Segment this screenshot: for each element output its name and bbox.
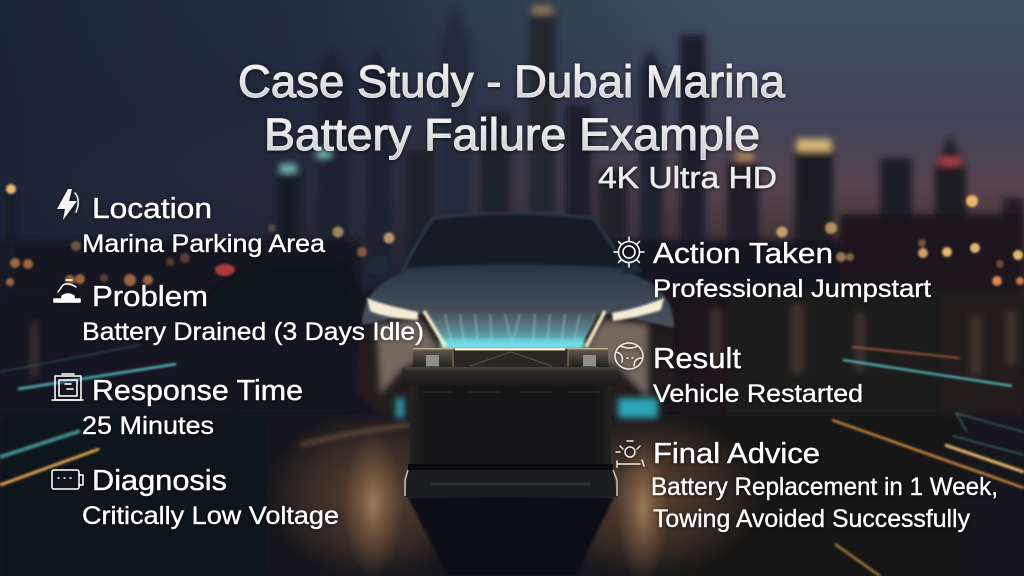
- item: response time: 25 Minutes: [82, 412, 214, 440]
- blue underglow: [396, 398, 658, 418]
- car battery: [402, 348, 619, 497]
- item: location: Marina Parking Area: [82, 230, 325, 258]
- battery lid: [402, 367, 619, 386]
- battery case: [410, 386, 611, 466]
- battery base: [405, 470, 617, 497]
- item: result: Result: [653, 343, 741, 375]
- icon: car with fault: [54, 280, 80, 302]
- item: diagnosis: Diagnosis: [92, 465, 227, 497]
- title: Battery Failure Example: [264, 109, 760, 160]
- icon: gear: [614, 237, 644, 267]
- left column items: [52, 189, 424, 530]
- item: final advice: Final Advice: [653, 438, 820, 470]
- car lower body: [356, 320, 676, 415]
- subtitle: 4K Ultra HD: 4K Ultra HD: [598, 160, 777, 195]
- background: marina water and reflections: [0, 290, 1024, 420]
- item: result: [615, 343, 863, 408]
- icon: advice gears: [616, 441, 644, 467]
- front grille with blue glow: [424, 311, 600, 348]
- side mirrors: [364, 255, 642, 275]
- item: final advice: Battery Replacement in 1 Week,: [651, 473, 998, 501]
- battery top cover: [413, 348, 608, 368]
- icon: low battery: [52, 470, 83, 489]
- item: problem: [54, 280, 424, 346]
- icon: gauge: [615, 343, 643, 369]
- right column items: [614, 237, 998, 533]
- item: location: Location: [92, 193, 212, 225]
- battery terminals: [426, 355, 439, 369]
- windshield: [403, 213, 627, 270]
- icon: lightning bolt: [57, 189, 78, 220]
- item: response time: Response Time: [92, 375, 303, 407]
- item: action taken: Professional Jumpstart: [653, 275, 931, 303]
- item: response time: [52, 374, 303, 440]
- item: action taken: Action Taken: [653, 238, 833, 270]
- car side panels: [376, 320, 648, 398]
- item: diagnosis: [52, 465, 339, 530]
- background: wet road with warm reflections: [0, 410, 1024, 576]
- background: bokeh city lights: [6, 184, 1024, 286]
- light trails: right: [832, 347, 1024, 576]
- title: Case Study - Dubai Marina: [238, 56, 786, 107]
- item: action taken: [614, 237, 931, 303]
- car: [356, 213, 676, 418]
- car hood: [362, 266, 674, 328]
- item: final advice: [616, 438, 998, 533]
- item: result: Vehicle Restarted: [653, 380, 863, 408]
- background: blurred skyline: [0, 0, 1024, 300]
- item: location: [57, 189, 325, 258]
- icon: timer device: [52, 374, 83, 400]
- background: dark parked car: [195, 262, 362, 320]
- item: diagnosis: Critically Low Voltage: [82, 502, 339, 530]
- headlights: [367, 298, 418, 320]
- item: problem: Problem: [92, 281, 208, 313]
- title: [238, 56, 786, 160]
- item: problem: Battery Drained (3 Days Idle): [82, 318, 424, 346]
- light trails: left: [0, 345, 176, 485]
- background: night sky: [0, 0, 1024, 300]
- item: final advice: Towing Avoided Successfully: [653, 505, 970, 533]
